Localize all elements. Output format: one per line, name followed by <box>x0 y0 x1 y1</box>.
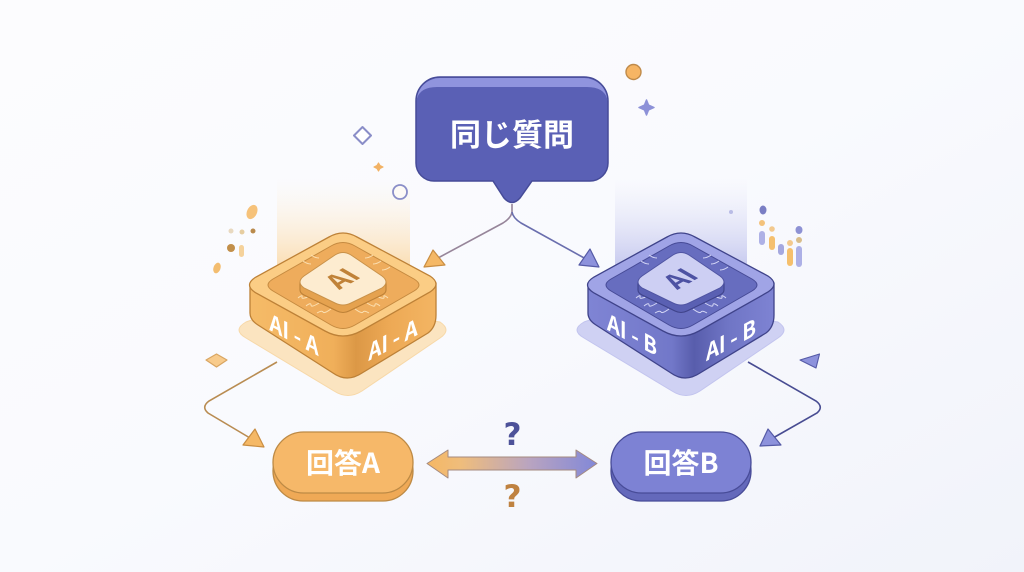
left label A: AI - A <box>268 302 319 363</box>
icon: orange sparkle <box>374 163 383 171</box>
arrow: AI-B to answer B <box>748 362 820 446</box>
speech bubble: same question <box>416 77 608 202</box>
arrow: question to AI-A <box>424 204 512 267</box>
decorative bars: mixed cluster <box>729 206 802 267</box>
left label B: AI - B <box>606 302 657 363</box>
arrow: AI-A to answer A <box>205 362 277 447</box>
AI cap A <box>300 282 386 312</box>
recess B <box>606 242 757 328</box>
body B <box>588 283 774 378</box>
bubble text: 同じ質問 <box>450 110 574 155</box>
icon: purple sparkle <box>639 100 654 115</box>
body A <box>250 283 436 378</box>
right label B: AI - B <box>705 308 756 369</box>
top face A <box>250 233 436 336</box>
question mark: bottom: ? <box>504 479 521 515</box>
cap label A: AI <box>312 262 369 295</box>
recess A <box>268 242 419 328</box>
icon: outlined circle <box>393 185 407 199</box>
answer pill A <box>273 432 413 501</box>
AI cap B <box>638 282 724 312</box>
icon: purple triangle <box>800 354 820 368</box>
question mark: top: ? <box>504 417 521 453</box>
answer pill B <box>611 432 751 501</box>
right label A: AI - A <box>367 308 418 369</box>
circuit traces A <box>298 255 390 313</box>
base plate B <box>577 303 784 396</box>
circuit traces B <box>636 255 728 313</box>
top face B <box>588 233 774 336</box>
icon: orange circle <box>626 64 641 80</box>
answer A text: 回答A <box>306 442 381 482</box>
chip: AI-A <box>239 233 446 396</box>
light beam A <box>277 178 410 270</box>
icon: orange diamond <box>206 354 227 367</box>
double arrow between answers <box>427 450 597 478</box>
answer B text: 回答B <box>643 442 719 482</box>
base plate A <box>239 303 446 396</box>
light beam B <box>615 178 747 270</box>
arrow: question to AI-B <box>512 212 599 267</box>
decorative dots: orange cluster <box>212 203 260 274</box>
icon: outlined diamond <box>354 127 371 144</box>
chip: AI-B <box>577 233 784 396</box>
cap label B: AI <box>650 262 707 295</box>
